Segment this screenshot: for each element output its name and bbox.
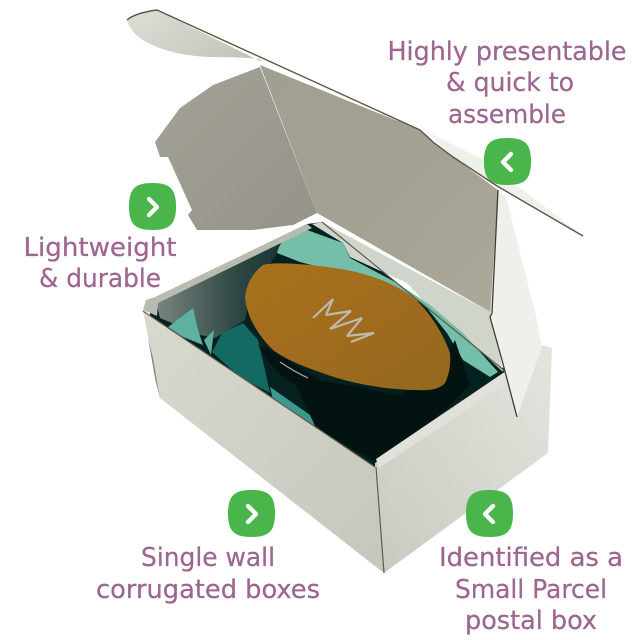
top lid tab — [127, 10, 262, 62]
inner lid panel — [260, 65, 498, 313]
callout: identified as small parcel: Small Parcel — [455, 575, 607, 605]
callout: highly presentable: assemble — [448, 100, 566, 130]
callout: lightweight — [24, 233, 177, 294]
callout: highly presentable: Highly presentable — [388, 37, 626, 67]
callout: single wall: corrugated boxes — [96, 575, 320, 605]
icon: left chevron button top — [484, 138, 531, 185]
left rim fold — [143, 224, 312, 316]
lid flap edge — [490, 190, 517, 417]
callout: lightweight: Lightweight — [24, 233, 177, 263]
icon: right chevron button left — [129, 183, 176, 230]
tin body — [258, 340, 470, 462]
back interior wall — [312, 222, 503, 372]
inner side flap — [155, 67, 317, 230]
front-left face — [143, 311, 384, 573]
callout: identified as small parcel: Identified as a — [439, 543, 623, 573]
callout: single wall: Single wall — [141, 543, 275, 573]
front lid flap — [490, 190, 542, 417]
box artwork — [127, 10, 583, 573]
icon: right chevron button bottom — [228, 490, 275, 537]
callout: lightweight: & durable — [39, 264, 161, 294]
interior dark — [150, 222, 508, 470]
lid corrugated edge — [127, 10, 583, 236]
callout: identified as small parcel — [439, 543, 623, 636]
left interior wall — [155, 226, 307, 338]
tissue teal folds — [212, 323, 270, 393]
callout: highly presentable: & quick to — [446, 68, 574, 98]
callout: identified as small parcel: postal box — [465, 606, 597, 636]
logo on lid — [313, 299, 374, 342]
right rim fold — [376, 371, 508, 468]
corrugated edges — [143, 222, 506, 573]
callout: highly presentable — [388, 37, 626, 130]
right face — [375, 345, 552, 573]
tissue paper left — [168, 308, 214, 355]
front-left corner shadow — [148, 338, 160, 399]
icon: left chevron button bottom right — [466, 490, 513, 537]
callout: single wall — [96, 543, 320, 605]
outer lid flap sliver — [427, 132, 583, 236]
tissue paper back — [277, 230, 498, 377]
tin highlight — [280, 362, 308, 378]
tissue label — [270, 387, 315, 428]
wooden lid — [245, 263, 450, 390]
